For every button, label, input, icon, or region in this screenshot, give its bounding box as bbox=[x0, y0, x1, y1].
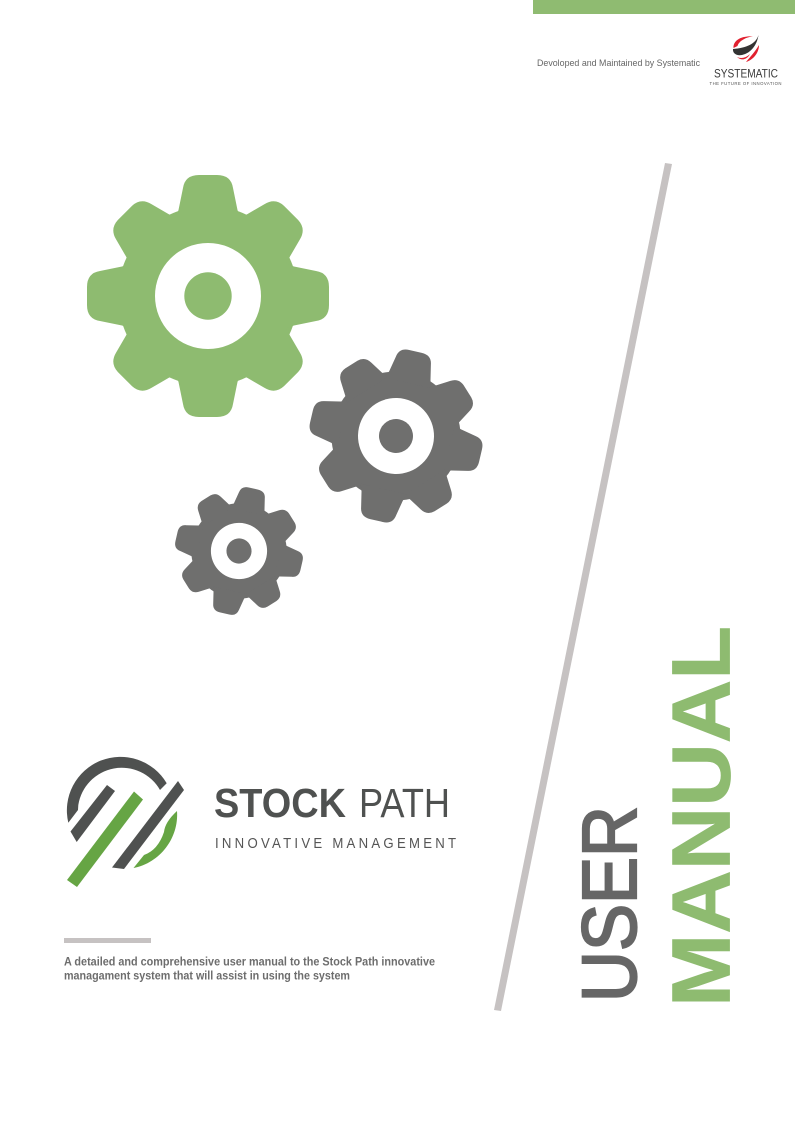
description text: managament system that will assist in using the system bbox=[64, 970, 350, 982]
logo name: STOCK PATH: PATH bbox=[359, 780, 450, 826]
logo short bar bbox=[70, 785, 115, 842]
Systematic wordmark: SYSTEMATIC bbox=[714, 68, 778, 80]
diagonal divider line bbox=[494, 163, 672, 1011]
short grey rule bbox=[64, 938, 151, 943]
title: USER: USER bbox=[567, 806, 653, 1002]
top green bar bbox=[533, 0, 795, 14]
icon: large green gear bbox=[87, 175, 329, 417]
Systematic tagline: THE FUTURE OF INNOVATION bbox=[710, 81, 782, 86]
description text bbox=[64, 956, 435, 982]
Systematic logo bbox=[710, 35, 782, 86]
title: MANUAL: MANUAL bbox=[654, 626, 748, 1007]
logo tagline: INNOVATIVE MANAGEMENT bbox=[215, 834, 456, 851]
icon: Systematic swoosh bbox=[733, 35, 759, 62]
logo name: STOCK PATH: STOCK bbox=[214, 780, 346, 826]
logo name: STOCK PATH bbox=[214, 780, 450, 826]
logo green bar bbox=[67, 792, 143, 887]
Stock Path logo mark bbox=[67, 757, 184, 887]
description text: A detailed and comprehensive user manual to the Stock Path innovative bbox=[64, 956, 435, 968]
developer credit text: Devoloped and Maintained by Systematic bbox=[537, 57, 700, 68]
icon: medium grey gear bbox=[292, 332, 500, 540]
logo long bar bbox=[112, 781, 184, 869]
logo green arc bbox=[134, 811, 177, 868]
icon: small grey gear bbox=[162, 474, 316, 628]
logo arc bbox=[67, 757, 167, 823]
